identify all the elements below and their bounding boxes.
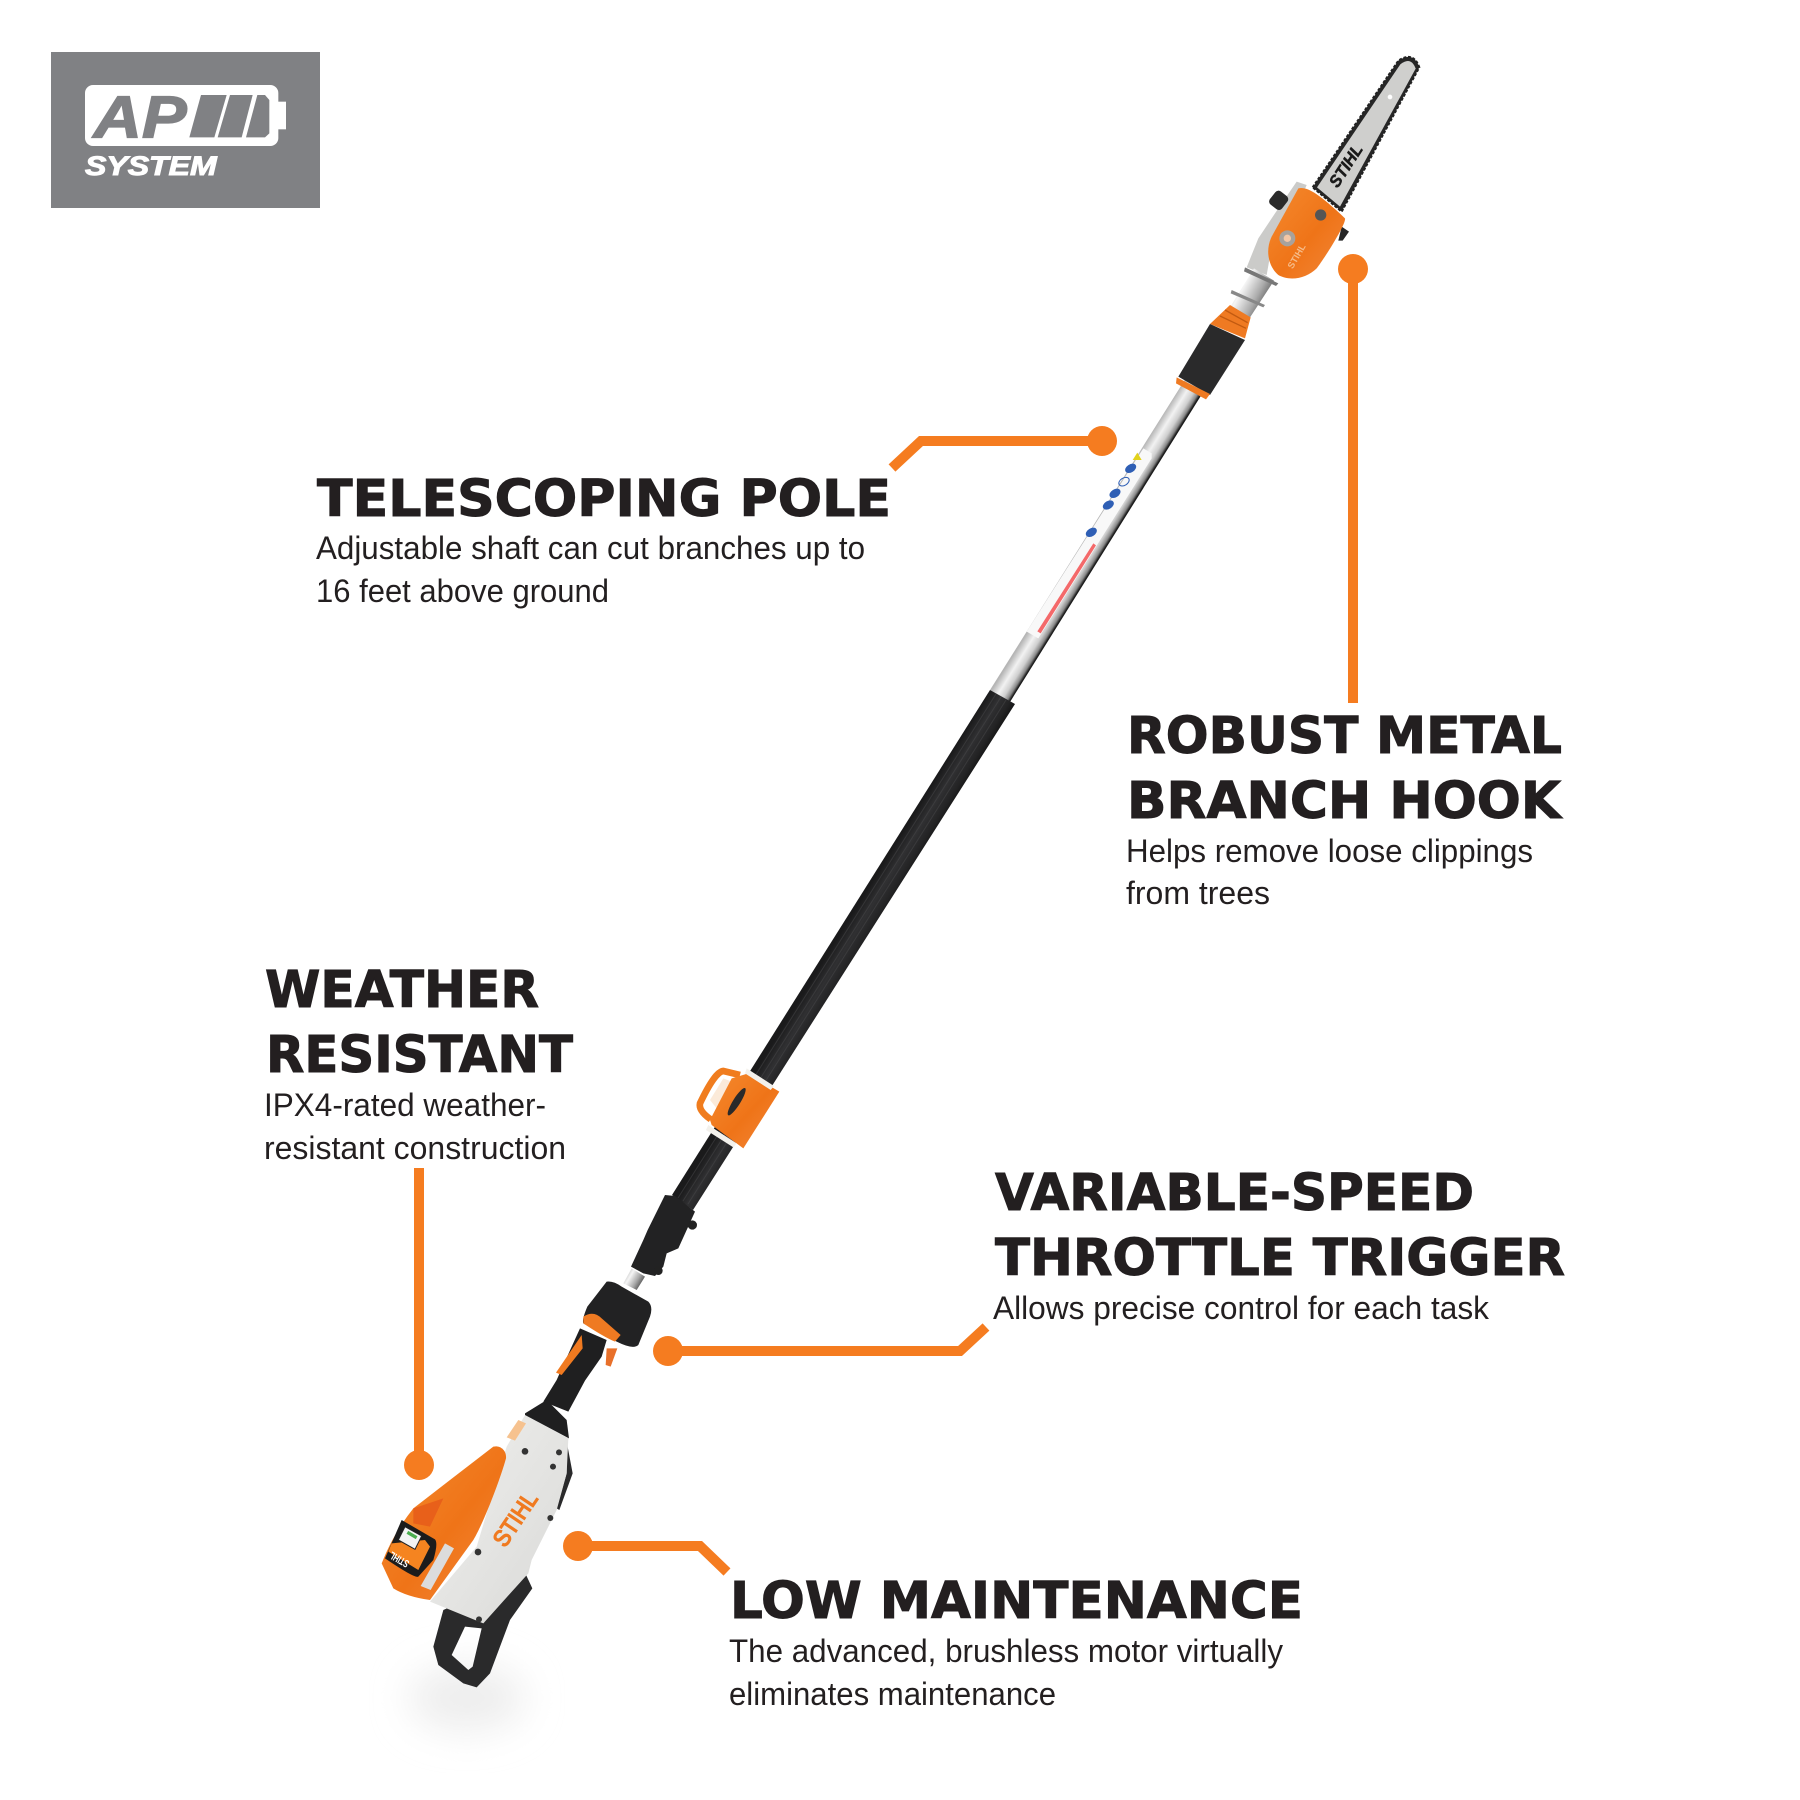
right trigger bbox=[606, 1348, 617, 1367]
description: Allows precise control for each task bbox=[993, 1290, 1490, 1326]
description: Adjustable shaft can cut branches up to bbox=[316, 530, 865, 566]
white motor housing bbox=[430, 1415, 568, 1623]
heading bbox=[1127, 707, 1564, 831]
silver stub bbox=[623, 1268, 645, 1290]
callout: low maintenance bbox=[563, 1531, 1303, 1712]
heading bbox=[265, 961, 573, 1085]
heading: WEATHER bbox=[265, 961, 539, 1020]
black neck collar bbox=[525, 1400, 569, 1438]
orange lever bbox=[583, 1314, 621, 1342]
icon: battery outline with AP and charge bars bbox=[85, 83, 286, 181]
orange battery cover bbox=[382, 1446, 506, 1600]
bar brand text: STIHL bbox=[1325, 141, 1367, 191]
description: Helps remove loose clippings bbox=[1126, 833, 1533, 869]
orange vent stripes bbox=[507, 1420, 526, 1441]
logo: AP System battery badge bbox=[51, 52, 320, 208]
description bbox=[316, 530, 865, 609]
description: resistant construction bbox=[264, 1130, 566, 1166]
housing brand text: STIHL bbox=[488, 1487, 543, 1551]
callout: telescoping pole bbox=[316, 426, 1117, 609]
orange spring collar bbox=[1210, 305, 1251, 338]
description: IPX4-rated weather- bbox=[264, 1087, 546, 1123]
callout: weather resistant bbox=[264, 961, 573, 1480]
description bbox=[1126, 833, 1533, 911]
ribbed black grip bbox=[672, 690, 1015, 1210]
orange shaft clamp bbox=[700, 1068, 779, 1148]
coupling sleeve bbox=[631, 1195, 695, 1276]
icon: battery outline with AP and charge bars: AP bbox=[91, 83, 187, 150]
ground shadow bbox=[409, 1664, 525, 1732]
description bbox=[729, 1633, 1283, 1712]
metal collars bbox=[745, 1068, 774, 1090]
left trigger bbox=[556, 1335, 583, 1375]
battery display bbox=[398, 1527, 422, 1549]
chrome neck bbox=[1228, 268, 1274, 320]
heading: TELESCOPING POLE bbox=[317, 470, 891, 529]
heading: RESISTANT bbox=[266, 1026, 573, 1085]
saw bar and head: STIHL bbox=[1286, 242, 1308, 270]
silver gear housing bbox=[1247, 182, 1307, 275]
description: from trees bbox=[1126, 875, 1270, 911]
product: cordless pole pruner bbox=[382, 57, 1419, 1732]
heading: VARIABLE-SPEED bbox=[995, 1164, 1474, 1223]
description: 16 feet above ground bbox=[316, 573, 609, 609]
rear handle bbox=[433, 1573, 532, 1687]
orange chain cover bbox=[1268, 188, 1345, 278]
hook bbox=[1338, 227, 1349, 241]
guide bar bbox=[1317, 61, 1416, 207]
clamp slot bbox=[725, 1086, 748, 1117]
telescoping metal tube bbox=[990, 370, 1217, 702]
description: eliminates maintenance bbox=[729, 1676, 1056, 1712]
heading bbox=[995, 1164, 1565, 1288]
battery brand text: STIHL bbox=[387, 1549, 411, 1569]
clamp loop handle bbox=[700, 1071, 740, 1119]
tension knob bbox=[1267, 189, 1290, 212]
battery bbox=[385, 1520, 436, 1577]
rear grip bbox=[543, 1328, 607, 1412]
description bbox=[264, 1087, 566, 1166]
power head body bbox=[382, 1400, 573, 1687]
callout: branch hook bbox=[1126, 254, 1564, 911]
clamp body bbox=[710, 1073, 779, 1148]
housing screws bbox=[475, 1448, 562, 1622]
chain bbox=[1313, 57, 1419, 212]
coupling and trigger handle bbox=[543, 1195, 697, 1412]
rating plate bbox=[421, 1543, 454, 1590]
callout: throttle trigger bbox=[653, 1164, 1565, 1366]
heading: THROTTLE TRIGGER bbox=[995, 1229, 1565, 1288]
heading: LOW MAINTENANCE bbox=[730, 1572, 1303, 1631]
heading: BRANCH HOOK bbox=[1127, 772, 1564, 831]
pole label section bbox=[1027, 448, 1152, 638]
orange ring bbox=[1176, 377, 1210, 399]
heading: ROBUST METAL bbox=[1127, 707, 1562, 766]
icon: battery outline with AP and charge bars: SYSTEM bbox=[85, 151, 218, 181]
saw bar and head bbox=[1176, 57, 1419, 399]
description: The advanced, brushless motor virtually bbox=[729, 1633, 1283, 1669]
control head bbox=[583, 1282, 651, 1347]
black sleeve bbox=[1178, 324, 1245, 395]
side strap bbox=[557, 1442, 573, 1510]
